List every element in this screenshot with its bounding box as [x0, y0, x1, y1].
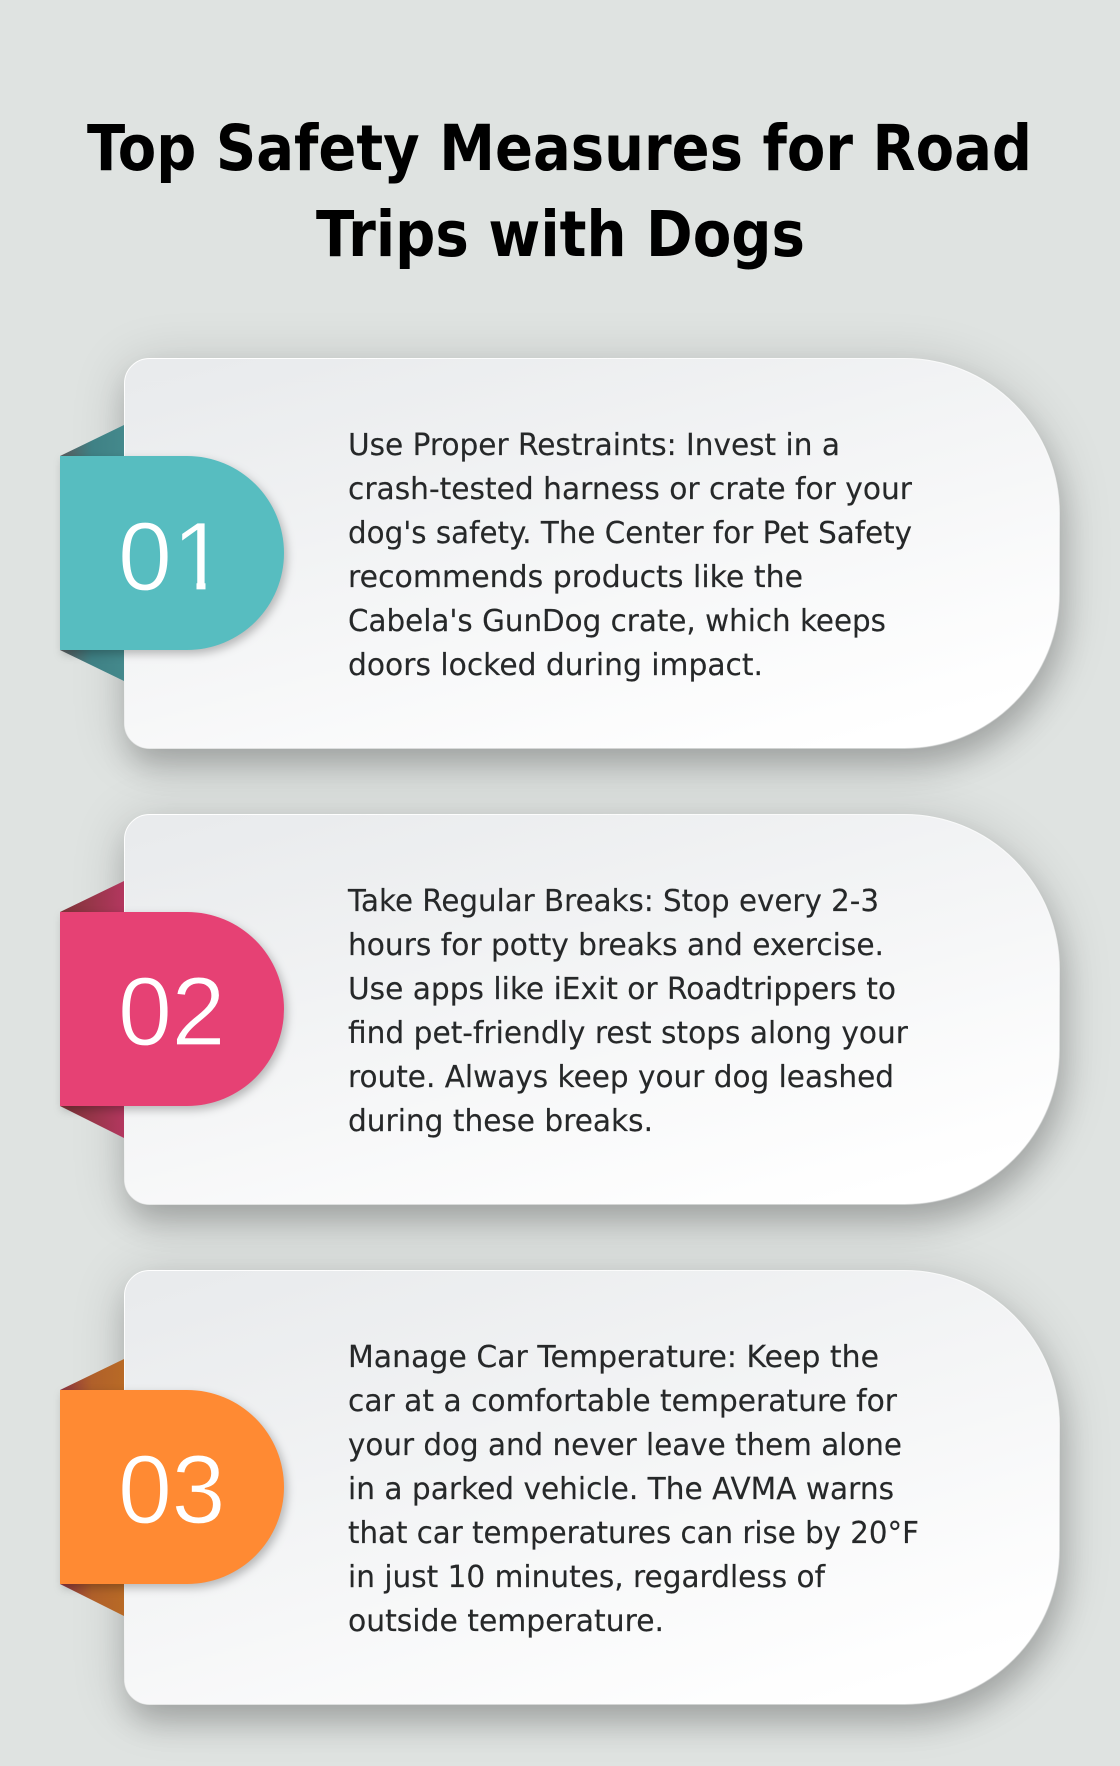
- body text: outside temperature.: [348, 1604, 664, 1639]
- body text: [348, 428, 913, 683]
- body text: Use Proper Restraints: Invest in a: [348, 428, 840, 463]
- title: Trips with Dogs: [316, 198, 805, 271]
- body text: Use apps like iExit or Roadtrippers to: [348, 972, 896, 1007]
- title: Top Safety Measures for Road: [87, 112, 1032, 185]
- body text: dog's safety. The Center for Pet Safety: [348, 516, 912, 551]
- title: [87, 112, 1032, 271]
- body text: car at a comfortable temperature for: [348, 1384, 898, 1419]
- ribbon folds: [60, 425, 124, 681]
- card background: [124, 814, 1060, 1204]
- number: 0: [118, 1435, 172, 1544]
- number: 2: [172, 957, 225, 1066]
- number: 0: [118, 502, 172, 611]
- number: 1: [172, 502, 226, 611]
- body text: Manage Car Temperature: Keep the: [348, 1340, 879, 1375]
- number: [118, 1435, 225, 1544]
- body text: doors locked during impact.: [348, 648, 763, 683]
- number: [122, 522, 206, 590]
- card background: [124, 1270, 1060, 1704]
- body text: [348, 1340, 919, 1639]
- ribbon folds: [60, 881, 124, 1138]
- body text: during these breaks.: [348, 1104, 653, 1139]
- body text: in just 10 minutes, regardless of: [348, 1560, 826, 1595]
- body text: find pet-friendly rest stops along your: [348, 1016, 909, 1051]
- number: [118, 957, 225, 1066]
- number badge: [60, 456, 284, 650]
- body text: that car temperatures can rise by 20°F: [348, 1516, 919, 1551]
- body text: Take Regular Breaks: Stop every 2-3: [347, 884, 879, 919]
- body text: your dog and never leave them alone: [348, 1428, 902, 1463]
- number: 0: [118, 957, 172, 1066]
- number badge: [60, 912, 284, 1106]
- body text: [347, 884, 909, 1139]
- body text: in a parked vehicle. The AVMA warns: [348, 1472, 894, 1507]
- panel: step 03 car temperature: [60, 1270, 1060, 1704]
- body text: hours for potty breaks and exercise.: [348, 928, 884, 963]
- card background: [124, 358, 1060, 748]
- panel: step 01 proper restraints: [60, 358, 1060, 748]
- number: 3: [172, 1435, 225, 1544]
- body text: recommends products like the: [348, 560, 803, 595]
- number badge: [60, 1390, 284, 1584]
- body text: crash-tested harness or crate for your: [348, 472, 913, 507]
- body text: route. Always keep your dog leashed: [348, 1060, 894, 1095]
- ribbon folds: [60, 1359, 124, 1616]
- panel: step 02 regular breaks: [60, 814, 1060, 1204]
- body text: Cabela's GunDog crate, which keeps: [348, 604, 886, 639]
